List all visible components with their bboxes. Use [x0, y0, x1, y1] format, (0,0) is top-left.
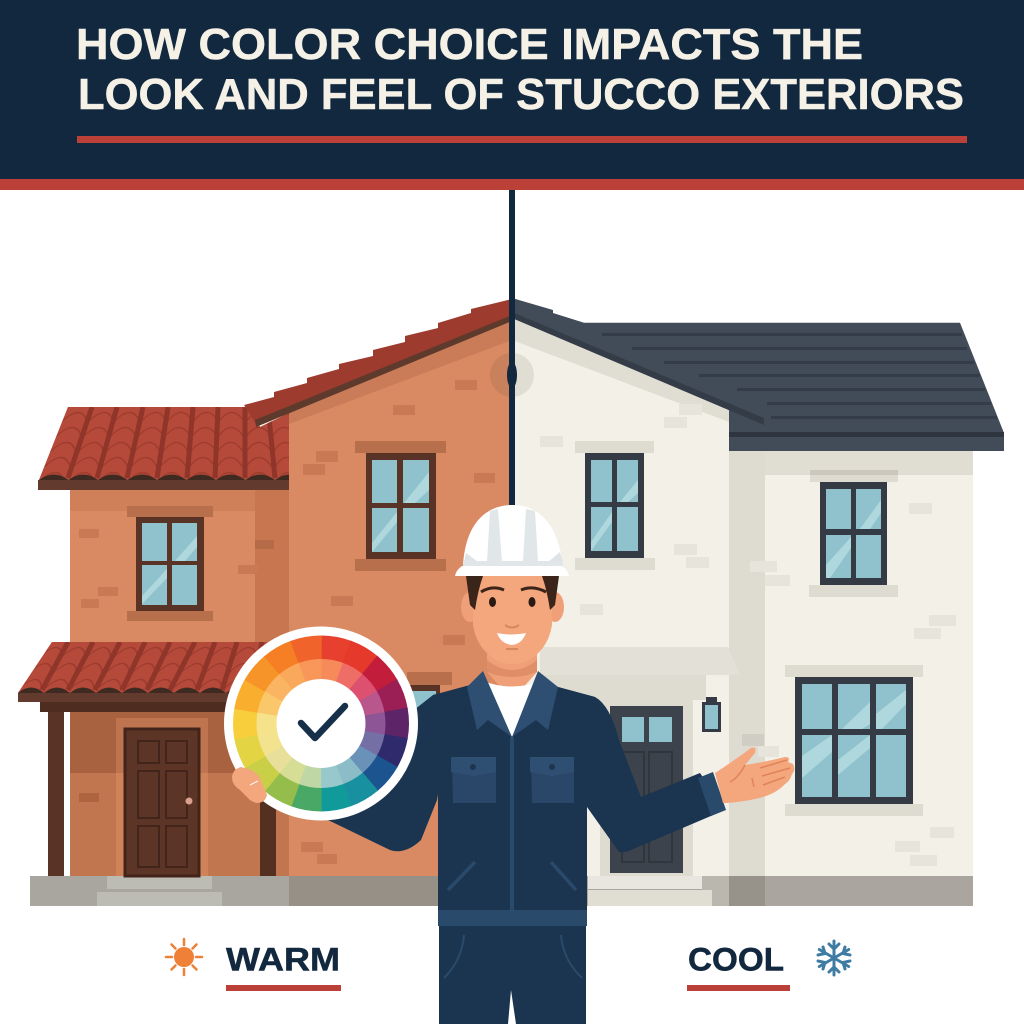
- title: LOOK AND FEEL OF STUCCO EXTERIORS: [78, 70, 964, 119]
- cool door: [600, 695, 693, 876]
- warm terracotta half of house: [10, 299, 534, 906]
- wall lantern: [702, 697, 721, 732]
- warm wing wall: [70, 490, 289, 643]
- warm porch posts: [48, 702, 276, 876]
- outer colour ring: [214, 616, 428, 831]
- warm vent: [490, 353, 534, 397]
- warm underline: [226, 985, 341, 991]
- warm text: WARM: [226, 942, 340, 978]
- warm gable wall: [289, 316, 512, 876]
- check mark: [301, 706, 345, 738]
- cool window right upper: [809, 470, 898, 597]
- jacket collar: [467, 671, 558, 737]
- left hand holding wheel: [232, 767, 267, 803]
- cool gable wall: [512, 316, 729, 876]
- wheel white rim: [224, 626, 418, 820]
- cool porch canopy: [540, 647, 740, 700]
- cool picture window: [785, 665, 923, 816]
- wheel white centre: [276, 679, 366, 768]
- warm porch wall: [70, 712, 289, 876]
- right hand: [715, 748, 794, 803]
- warm base: [30, 876, 512, 906]
- warm door: [125, 729, 199, 876]
- head: [461, 576, 564, 664]
- title: HOW COLOR CHOICE IMPACTS THE: [76, 20, 863, 69]
- cool underline: [687, 985, 790, 991]
- warm label: [166, 939, 341, 991]
- inner colour ring: [245, 647, 397, 800]
- vertical divider line: [507, 190, 517, 506]
- cool bricks: [540, 404, 956, 866]
- warm main roof: [244, 299, 512, 427]
- warm wing tile roof: [38, 407, 289, 490]
- warm bricks: [79, 380, 495, 864]
- cool text: COOL: [688, 942, 784, 978]
- cool wing wall: [729, 451, 973, 876]
- title: [76, 20, 964, 119]
- neck shadow: [487, 660, 537, 677]
- cool cream half of house: [512, 298, 1004, 906]
- pockets: [448, 757, 576, 890]
- cool roof: [512, 298, 1004, 451]
- cool window centre: [575, 441, 655, 570]
- icon: sun: [166, 939, 202, 975]
- cool vent: [512, 353, 534, 397]
- white shirt: [483, 681, 541, 737]
- zipper: [510, 737, 514, 911]
- cool base: [512, 876, 973, 906]
- jacket torso: [433, 677, 595, 910]
- warm window behind colour wheel: [405, 672, 452, 735]
- header banner: [0, 0, 1024, 190]
- warm window left: [127, 506, 213, 621]
- jacket hem: [438, 910, 587, 926]
- neck: [487, 640, 537, 700]
- icon: snowflake: [818, 941, 850, 975]
- right cuff: [698, 772, 726, 816]
- trousers: [439, 925, 586, 1024]
- contractor figure: [300, 505, 794, 1024]
- hard hat: [455, 505, 569, 576]
- left sleeve: [300, 685, 470, 851]
- warm porch roof: [10, 640, 280, 712]
- right sleeve: [558, 687, 725, 852]
- warm window centre: [355, 441, 446, 571]
- cool label: [687, 941, 850, 991]
- colour wheel: [214, 616, 428, 831]
